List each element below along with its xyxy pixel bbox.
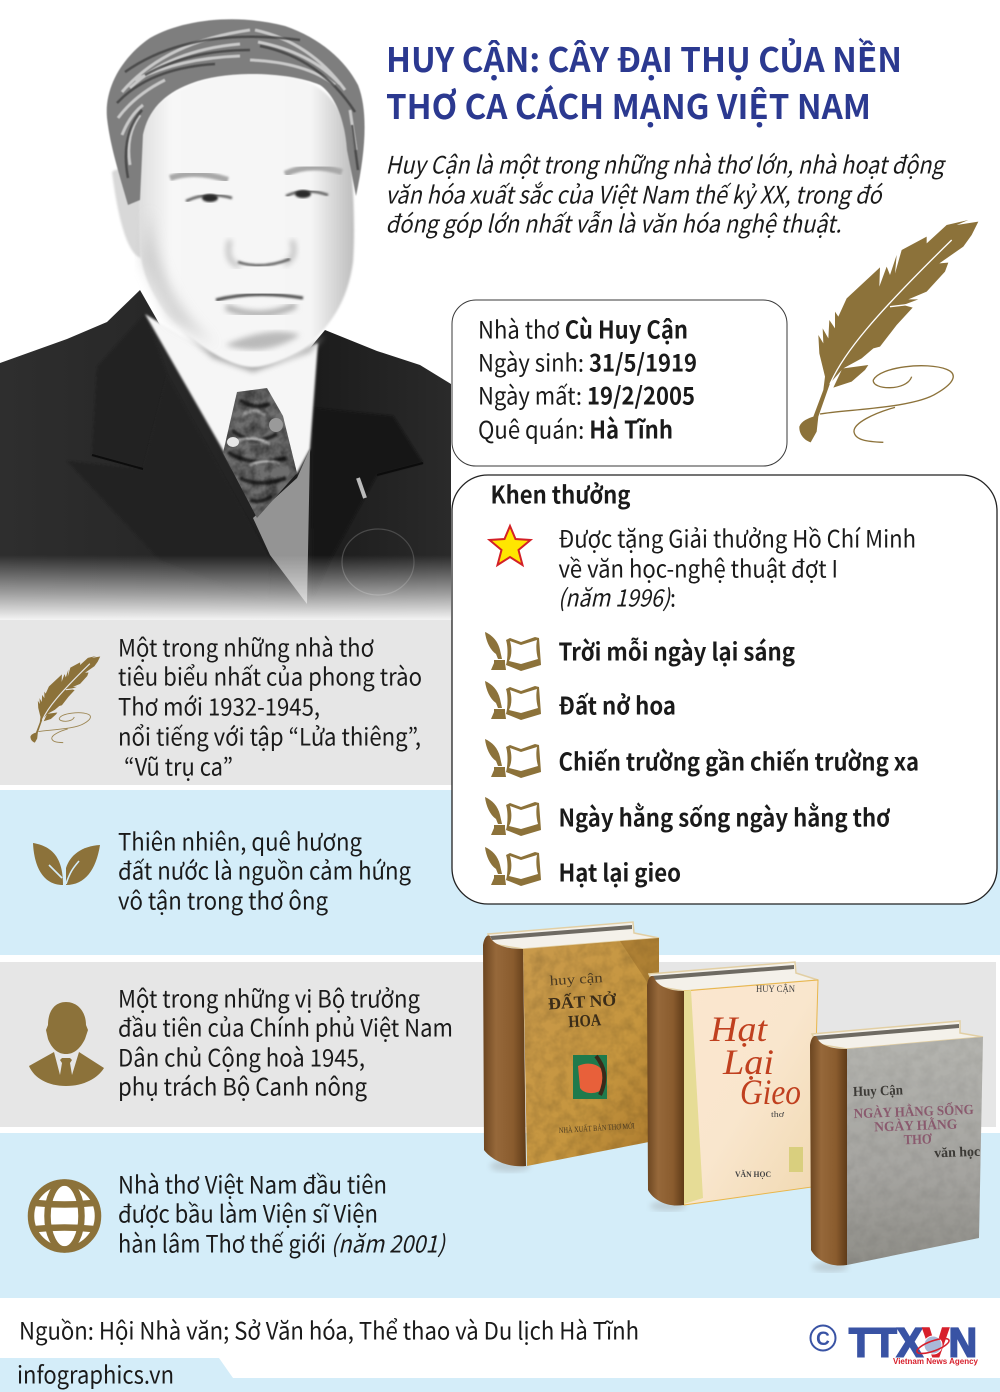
text: minister: đầu tiên của Chính phủ Việt Nam	[118, 1008, 453, 1043]
book: Hạt lại gieo: VĂN HỌC	[735, 1169, 771, 1179]
source line: Nguồn: Hội Nhà văn; Sở Văn hóa, Thể thao và Du lịch Hà Tĩnh	[19, 1311, 639, 1346]
panel: personal info: Ngày mất: 19/2/2005	[478, 376, 695, 411]
book: Đất nở hoa: huy cận	[549, 971, 603, 989]
book: Ngày hằng sống ngày hằng thơ: NGÀY HẰNG SỐNG	[853, 1100, 974, 1122]
award description: (năm 1996):	[558, 578, 676, 613]
text: poet	[118, 628, 422, 782]
text: poet: tiêu biểu nhất của phong trào	[118, 657, 422, 692]
neck shadow	[186, 335, 324, 375]
award book 1: Trời mỗi ngày lại sáng	[558, 632, 795, 667]
book: Hạt lại gieo: HUY CẬN	[756, 984, 795, 994]
icon: small feather	[30, 656, 100, 743]
title: HUY CẬN: CÂY ĐẠI THỤ CỦA NỀN	[386, 33, 902, 82]
panel: personal info: Ngày sinh: 31/5/1919	[478, 343, 697, 378]
text: nature: đất nước là nguồn cảm hứng	[118, 851, 411, 886]
title	[386, 33, 902, 129]
text: academy: Nhà thơ Việt Nam đầu tiên	[118, 1165, 387, 1200]
award book 4: Ngày hằng sống ngày hằng thơ	[558, 798, 891, 833]
bottom fade	[0, 555, 451, 620]
text: minister: Một trong những vị Bộ trưởng	[118, 979, 420, 1014]
portrait photo of Huy Cận	[0, 19, 451, 620]
band 3: grey, minister	[0, 962, 996, 1127]
tagline: Vietnam News Agency	[893, 1356, 978, 1366]
website: infographics.vn	[17, 1355, 174, 1390]
intro text: đóng góp lớn nhất vẫn là văn hóa nghệ thuật.	[386, 204, 842, 239]
icon: quill and book 3	[485, 739, 541, 778]
text: poet: nổi tiếng với tập “Lửa thiêng”,	[118, 717, 421, 752]
book: Hạt lại gieo: Gieo	[740, 1072, 801, 1112]
intro text: văn hóa xuất sắc của Việt Nam thế kỷ XX, trong đó	[386, 175, 884, 210]
award book 2: Đất nở hoa	[558, 686, 676, 721]
panel: personal info: Quê quán: Hà Tĩnh	[478, 410, 673, 445]
face	[139, 73, 354, 367]
copyright mark	[810, 1326, 836, 1350]
text: minister: Dân chủ Cộng hoà 1945,	[118, 1038, 365, 1073]
book: Ngày hằng sống ngày hằng thơ	[810, 1021, 983, 1272]
text: nature: vô tận trong thơ ông	[118, 881, 328, 916]
book: Đất nở hoa	[483, 922, 659, 1172]
book: Ngày hằng sống ngày hằng thơ: NGÀY HẰNG	[874, 1116, 958, 1135]
text: poet: Một trong những nhà thơ	[118, 628, 374, 663]
award book 3: Chiến trường gần chiến trường xa	[558, 742, 919, 777]
book: Đất nở hoa: ĐẤT NỞ	[548, 990, 617, 1013]
icon: star	[490, 526, 530, 565]
logo: TTXVN: C	[816, 1329, 830, 1350]
award description	[558, 519, 916, 613]
footer strip and tab	[0, 1358, 1000, 1392]
icon: quill and book 4	[485, 797, 541, 836]
text: academy: được bầu làm Viện sĩ Viện	[118, 1194, 378, 1229]
text: minister	[118, 979, 453, 1102]
ear	[112, 169, 141, 258]
award book 5: Hạt lại gieo	[558, 853, 681, 888]
icon: person in suit	[29, 1002, 104, 1086]
intro text: Huy Cận là một trong những nhà thơ lớn, nhà hoạt động	[386, 145, 947, 180]
text: poet: “Vũ trụ ca”	[124, 747, 233, 782]
text: minister: phụ trách Bộ Canh nông	[118, 1067, 367, 1102]
band 1: grey, poet	[0, 620, 452, 785]
intro text	[386, 145, 947, 239]
text: academy	[118, 1165, 446, 1259]
book: Hạt lại gieo: Lại	[722, 1042, 774, 1082]
face shading	[142, 167, 342, 350]
award description: Được tặng Giải thưởng Hồ Chí Minh	[558, 519, 916, 554]
icon: quill and book 5	[485, 847, 541, 886]
text: nature: Thiên nhiên, quê hương	[118, 822, 362, 857]
book: Đất nở hoa: HOA	[568, 1010, 602, 1031]
book: Hạt lại gieo: Hạt	[709, 1009, 768, 1049]
band 4: blue, academy	[0, 1133, 1000, 1298]
awards heading: Khen thưởng	[490, 475, 630, 510]
shirt and collar	[145, 314, 318, 473]
award description: về văn học-nghệ thuật đợt I	[558, 549, 838, 584]
hair	[107, 19, 365, 205]
suit jacket	[0, 290, 451, 620]
wordmark: TTXVN	[849, 1320, 977, 1366]
text: poet: Thơ mới 1932-1945,	[118, 687, 320, 722]
jacket lapel shading	[67, 314, 423, 600]
icon: quill and book 2	[485, 681, 541, 720]
title: THƠ CA CÁCH MẠNG VIỆT NAM	[386, 80, 871, 129]
book: Hạt lại gieo: thơ	[771, 1110, 785, 1119]
text: nature	[118, 822, 411, 916]
panel: personal info: Nhà thơ Cù Huy Cận	[478, 310, 688, 345]
panel: personal info	[452, 300, 787, 466]
book: Ngày hằng sống ngày hằng thơ: THƠ	[903, 1132, 933, 1148]
panel: awards	[452, 475, 997, 904]
icon: quill and book 1	[485, 632, 541, 671]
band 2: blue, nature	[0, 790, 1000, 955]
text: academy: hàn lâm Thơ thế giới (năm 2001)	[118, 1224, 446, 1259]
patterned tie	[223, 388, 297, 518]
book: Ngày hằng sống ngày hằng thơ: Huy Cận	[853, 1083, 903, 1100]
icon: leaves	[33, 843, 100, 885]
waistcoat	[253, 449, 310, 604]
icon: globe	[31, 1182, 98, 1250]
logo: TTXVN	[810, 1320, 978, 1366]
book: Ngày hằng sống ngày hằng thơ: văn học	[934, 1145, 980, 1161]
book: Đất nở hoa: NHÀ XUẤT BẢN THƠ MỚI	[559, 1120, 635, 1135]
book: Hạt lại gieo	[647, 962, 818, 1211]
icon: large feather quill	[799, 220, 978, 442]
